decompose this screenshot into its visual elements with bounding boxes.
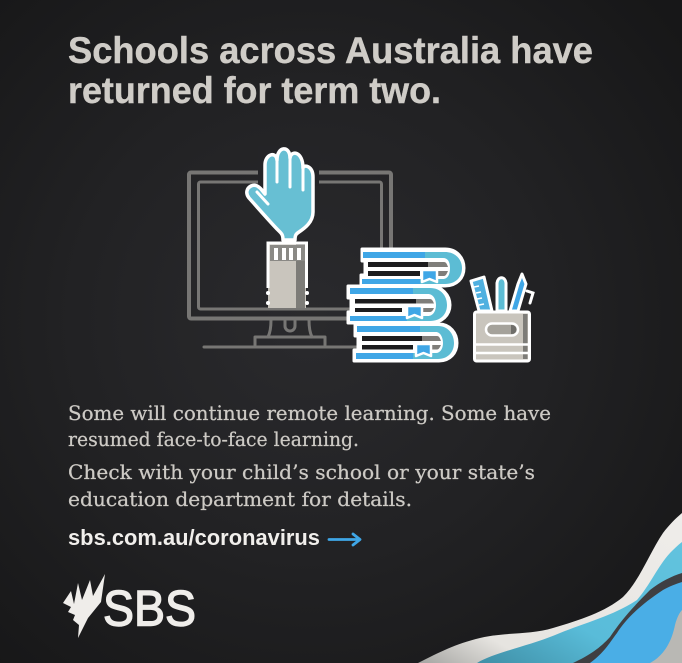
sleeve: [266, 242, 309, 308]
icon: computer monitor: [189, 172, 391, 347]
wave: blue: [590, 582, 682, 663]
icon: stack of books: [348, 249, 464, 361]
icon: pencil holder: [471, 274, 533, 361]
logo: SBS: [63, 574, 196, 638]
ruler: [471, 277, 492, 311]
logo wordmark: SBS: [103, 580, 196, 636]
text block: check with school: [68, 460, 535, 511]
wave: teal: [477, 542, 682, 663]
hand: [247, 146, 319, 240]
text block: remote learning: Some will continue remote learning. Some have: [68, 401, 551, 425]
logo mark: [63, 574, 105, 638]
book top: [361, 249, 464, 286]
wave: white: [418, 513, 682, 663]
text block: remote learning: resumed face-to-face learning.: [68, 427, 359, 451]
decorative waves: [418, 513, 682, 663]
pencil middle: [497, 278, 506, 311]
title: Schools across Australia have: [68, 30, 593, 71]
icon: raised hand with sleeve: [247, 146, 319, 308]
pencil right: [510, 274, 526, 311]
text block: remote learning: [68, 401, 551, 451]
title: [68, 30, 593, 111]
text block: check with school: Check with your child’s school or your state’s: [68, 460, 535, 484]
wave: grey: [650, 610, 682, 663]
text block: check with school: education department for details.: [68, 487, 412, 511]
title: returned for term two.: [68, 70, 441, 111]
wave: dark: [573, 573, 682, 663]
book middle: [348, 286, 450, 323]
link: sbs.com.au/coronavirus: sbs.com.au/coronavirus: [68, 525, 320, 550]
book bottom: [354, 324, 457, 361]
icon: arrow: [329, 534, 360, 545]
holder: [474, 312, 530, 361]
